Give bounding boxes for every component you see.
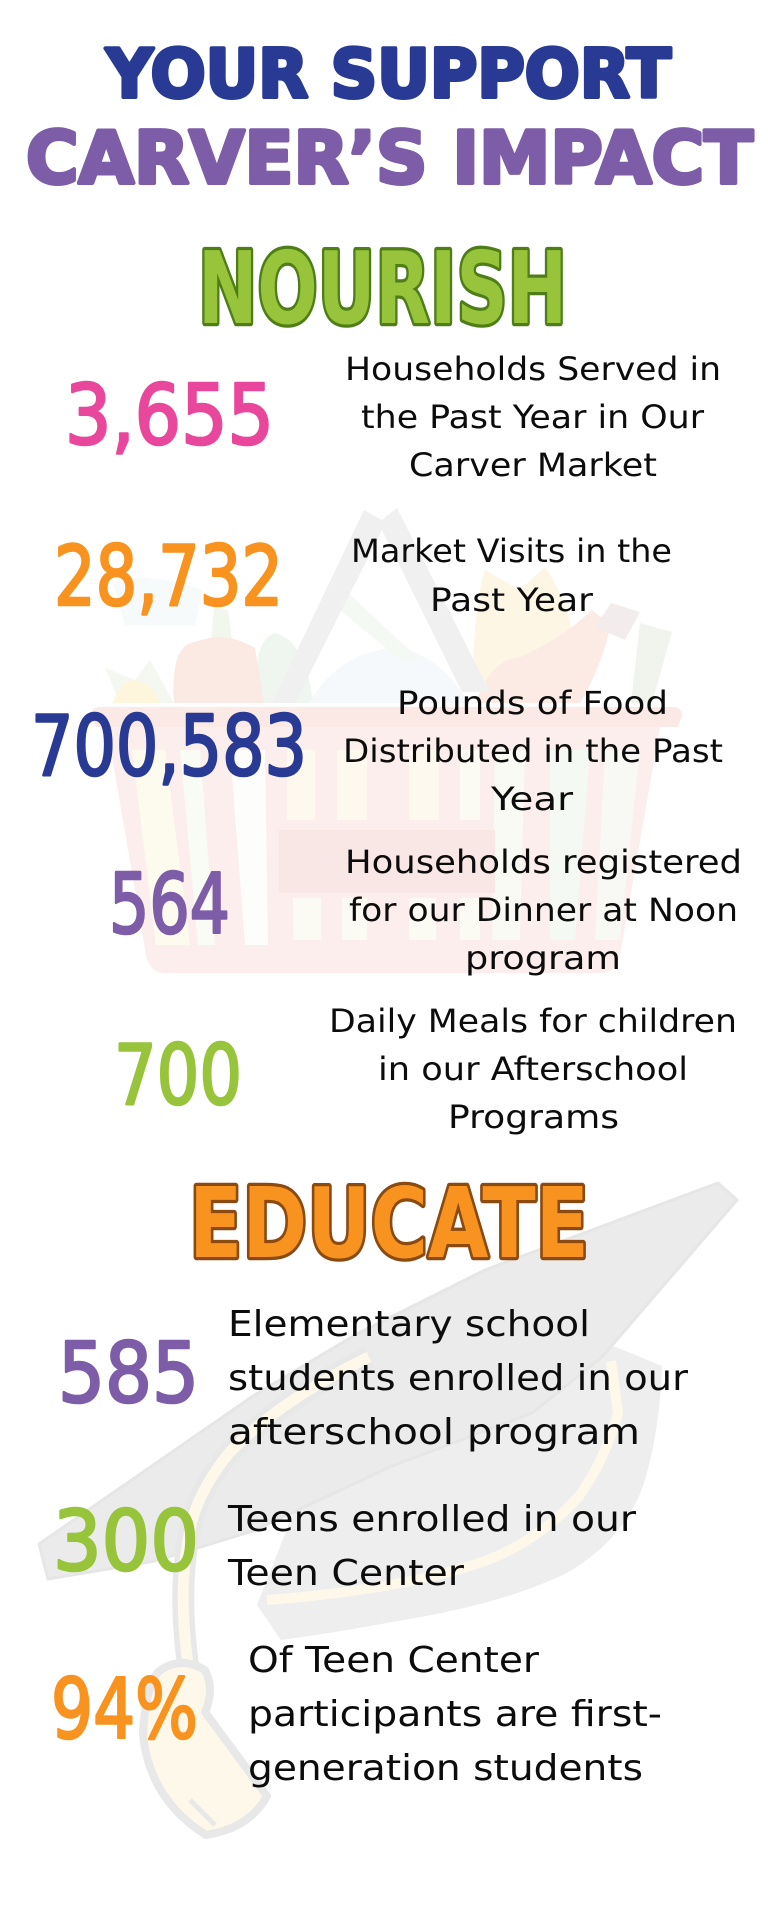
stat: dinner at noon households [109,843,742,977]
stat: market visits [54,528,672,625]
title [26,35,753,200]
stat: pounds of food [31,684,723,818]
stat: daily meals [114,1002,737,1136]
description [329,1002,737,1136]
stat: teens enrolled [53,1493,636,1594]
description: Distributed in the Past [343,732,723,770]
description: Daily Meals for children [329,1002,737,1040]
number: 300 [53,1493,199,1590]
description: Market Visits in the [351,532,672,570]
description [345,350,721,484]
description: the Past Year in Our [361,398,705,436]
description: students enrolled in our [228,1358,688,1399]
description: Programs [448,1098,619,1136]
description: Teen Center [227,1553,464,1594]
description [248,1640,662,1789]
number: 564 [109,856,230,953]
description: program [465,939,621,977]
background icon: graduation cap [39,1183,737,1835]
description: Households registered [345,843,742,881]
stat: households served [65,350,721,484]
stat: first-generation students [51,1640,662,1789]
description: Of Teen Center [248,1640,539,1681]
description: Carver Market [409,446,657,484]
description [228,1304,688,1453]
title line: your support: YOUR SUPPORT [105,35,671,113]
description: generation students [248,1748,643,1789]
description [343,684,723,818]
number: 3,655 [65,367,274,464]
description: afterschool program [228,1412,640,1453]
description [345,843,742,977]
number: 700 [114,1027,242,1124]
number: 28,732 [54,528,283,625]
section heading: nourish: NOURISH [198,230,567,347]
description: in our Afterschool [378,1050,688,1088]
stat: elementary students [58,1304,688,1453]
title line: carver's impact: CARVER’S IMPACT [26,116,753,200]
number: 94% [51,1661,198,1758]
description [351,532,672,619]
description: Year [490,780,574,818]
description: participants are first- [248,1694,662,1735]
description: Pounds of Food [397,684,668,722]
description: Elementary school [228,1304,590,1345]
section heading: educate: EDUCATE [189,1167,589,1280]
number: 700,583 [31,698,307,795]
background icon: grocery basket [91,508,682,973]
number: 585 [58,1325,199,1422]
description: for our Dinner at Noon [349,891,738,929]
description: Past Year [430,581,594,619]
description: Teens enrolled in our [227,1499,636,1540]
description [227,1499,636,1594]
description: Households Served in [345,350,721,388]
